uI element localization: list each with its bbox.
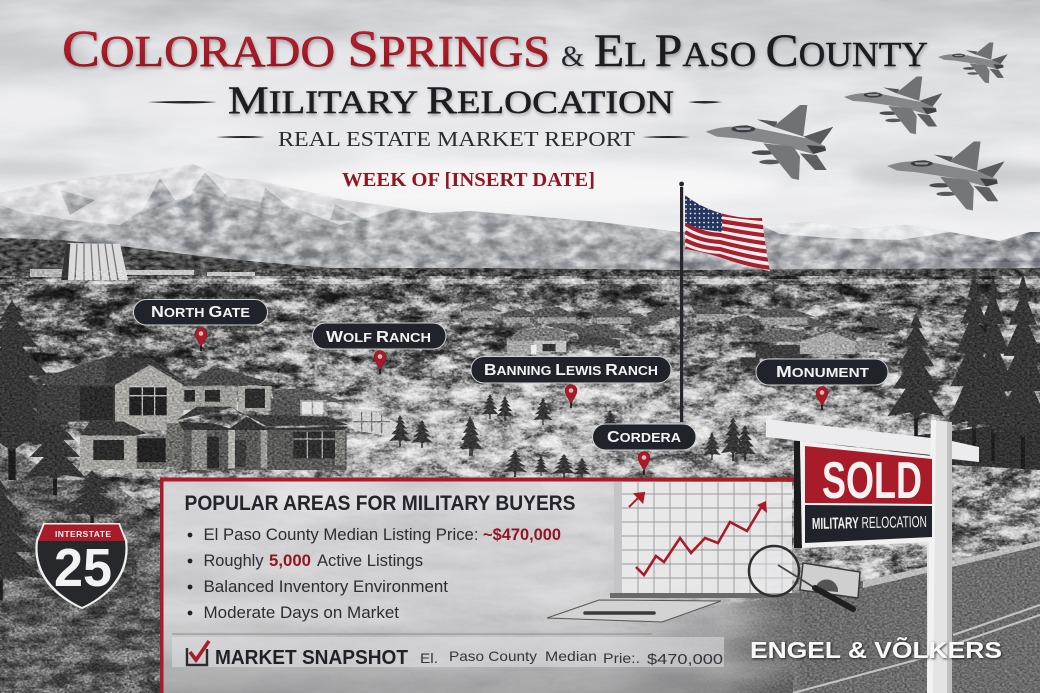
location label: Cordera: CORDERA [607, 429, 681, 446]
foreground trees: right pine stand [880, 274, 1040, 470]
background: Front Range mountains [0, 164, 1040, 270]
snapshot detail: Paso County [449, 648, 537, 664]
map pin: Cordera [638, 452, 650, 475]
clipboard and pen [547, 600, 721, 622]
location label: Monument [756, 359, 888, 385]
market snapshot label: MARKET SNAPSHOT [215, 646, 408, 669]
bullet list: Balanced Inventory Environment [204, 578, 448, 596]
snapshot detail: Median [545, 648, 597, 664]
sold yard sign [766, 419, 979, 693]
shield label: INTERSTATE [55, 529, 111, 539]
background: cloudy sky [0, 0, 1040, 260]
jet 1 [706, 105, 833, 180]
title: El Paso County: EL PASO COUNTY [594, 25, 928, 77]
Banning Lewis house [505, 327, 620, 355]
title: ampersand: & [561, 40, 584, 73]
market snapshot row [187, 641, 723, 669]
title: Colorado Springs: COLORADO SPRINGS [62, 21, 550, 78]
road [600, 541, 1040, 693]
background: distant tree line [0, 238, 1040, 276]
jet 3 [887, 141, 1004, 210]
bullet list: Roughly [204, 552, 264, 570]
tree and house texture wash [0, 270, 1040, 693]
fighter jets formation [706, 42, 1008, 210]
large foreground stone house [33, 357, 398, 470]
checkbox icon [187, 641, 209, 665]
map pin: Banning Lewis Ranch [565, 384, 577, 408]
subtitle: Real Estate Market Report: REAL ESTATE MARKET REPORT [278, 127, 635, 151]
bullet list: Active Listings [317, 552, 423, 570]
location label: Banning Lewis Ranch: BANNING LEWIS RANCH [484, 362, 658, 379]
subtitle: Military Relocation: MILITARY RELOCATION [228, 79, 674, 122]
location label: Banning Lewis Ranch [471, 356, 671, 383]
small red arrow [629, 493, 644, 507]
bullet list: ~$470,000 [483, 526, 561, 544]
snapshot detail: El. [420, 650, 438, 666]
sign crossbar [766, 419, 931, 455]
snapshot detail: Prie:. [603, 650, 640, 666]
location label: North Gate [134, 300, 268, 325]
rising market chart on gridded board [610, 482, 800, 598]
bullet list: 5,000 [269, 552, 311, 570]
Air Force Academy chapel and campus [30, 243, 255, 280]
location label: Monument: MONUMENT [776, 364, 869, 381]
location label: Cordera [592, 424, 696, 450]
interstate 25 shield [35, 523, 128, 609]
bullet list [188, 526, 561, 622]
map pin: North Gate [195, 328, 207, 351]
location label: Wolf Ranch [312, 323, 446, 349]
trend line [636, 506, 762, 575]
map pin: Wolf Ranch [374, 350, 386, 374]
title block [62, 21, 928, 191]
map pin: Monument [816, 386, 828, 410]
jet 4 [938, 42, 1008, 83]
foreground trees: left pines and brush [0, 300, 160, 693]
brand wordmark: ENGEL & VÕLKERS [750, 636, 1002, 663]
SOLD text: SOLD [822, 452, 922, 510]
sign board frame [794, 441, 802, 548]
residential neighbourhood houses [461, 303, 903, 367]
location label: North Gate: NORTH GATE [151, 304, 250, 321]
bullet list: Moderate Days on Market [204, 604, 399, 622]
location label: Wolf Ranch: WOLF RANCH [326, 329, 431, 346]
panel: popular areas for military buyers [160, 478, 800, 693]
snapshot detail [420, 648, 723, 668]
Military Relocation text: MILITARY RELOCATION [812, 514, 927, 533]
background: rolling foreground landscape [0, 276, 1040, 693]
shield number: 25 [54, 538, 112, 598]
jet 2 [844, 76, 942, 134]
magnifying glass [749, 546, 853, 609]
bullet list: El Paso County Median Listing Price: [204, 526, 478, 544]
black panel [805, 505, 932, 543]
foreground trees: mid field pines [389, 394, 756, 478]
red panel [805, 446, 932, 504]
date line: WEEK OF [INSERT DATE] [342, 169, 595, 191]
sign post [927, 420, 952, 693]
Monument house [739, 327, 893, 367]
documents behind magnifier [800, 563, 860, 598]
panel heading: POPULAR AREAS FOR MILITARY BUYERS [184, 492, 576, 515]
American flag on pole [679, 182, 775, 422]
snapshot detail: $470,000 [647, 651, 723, 668]
